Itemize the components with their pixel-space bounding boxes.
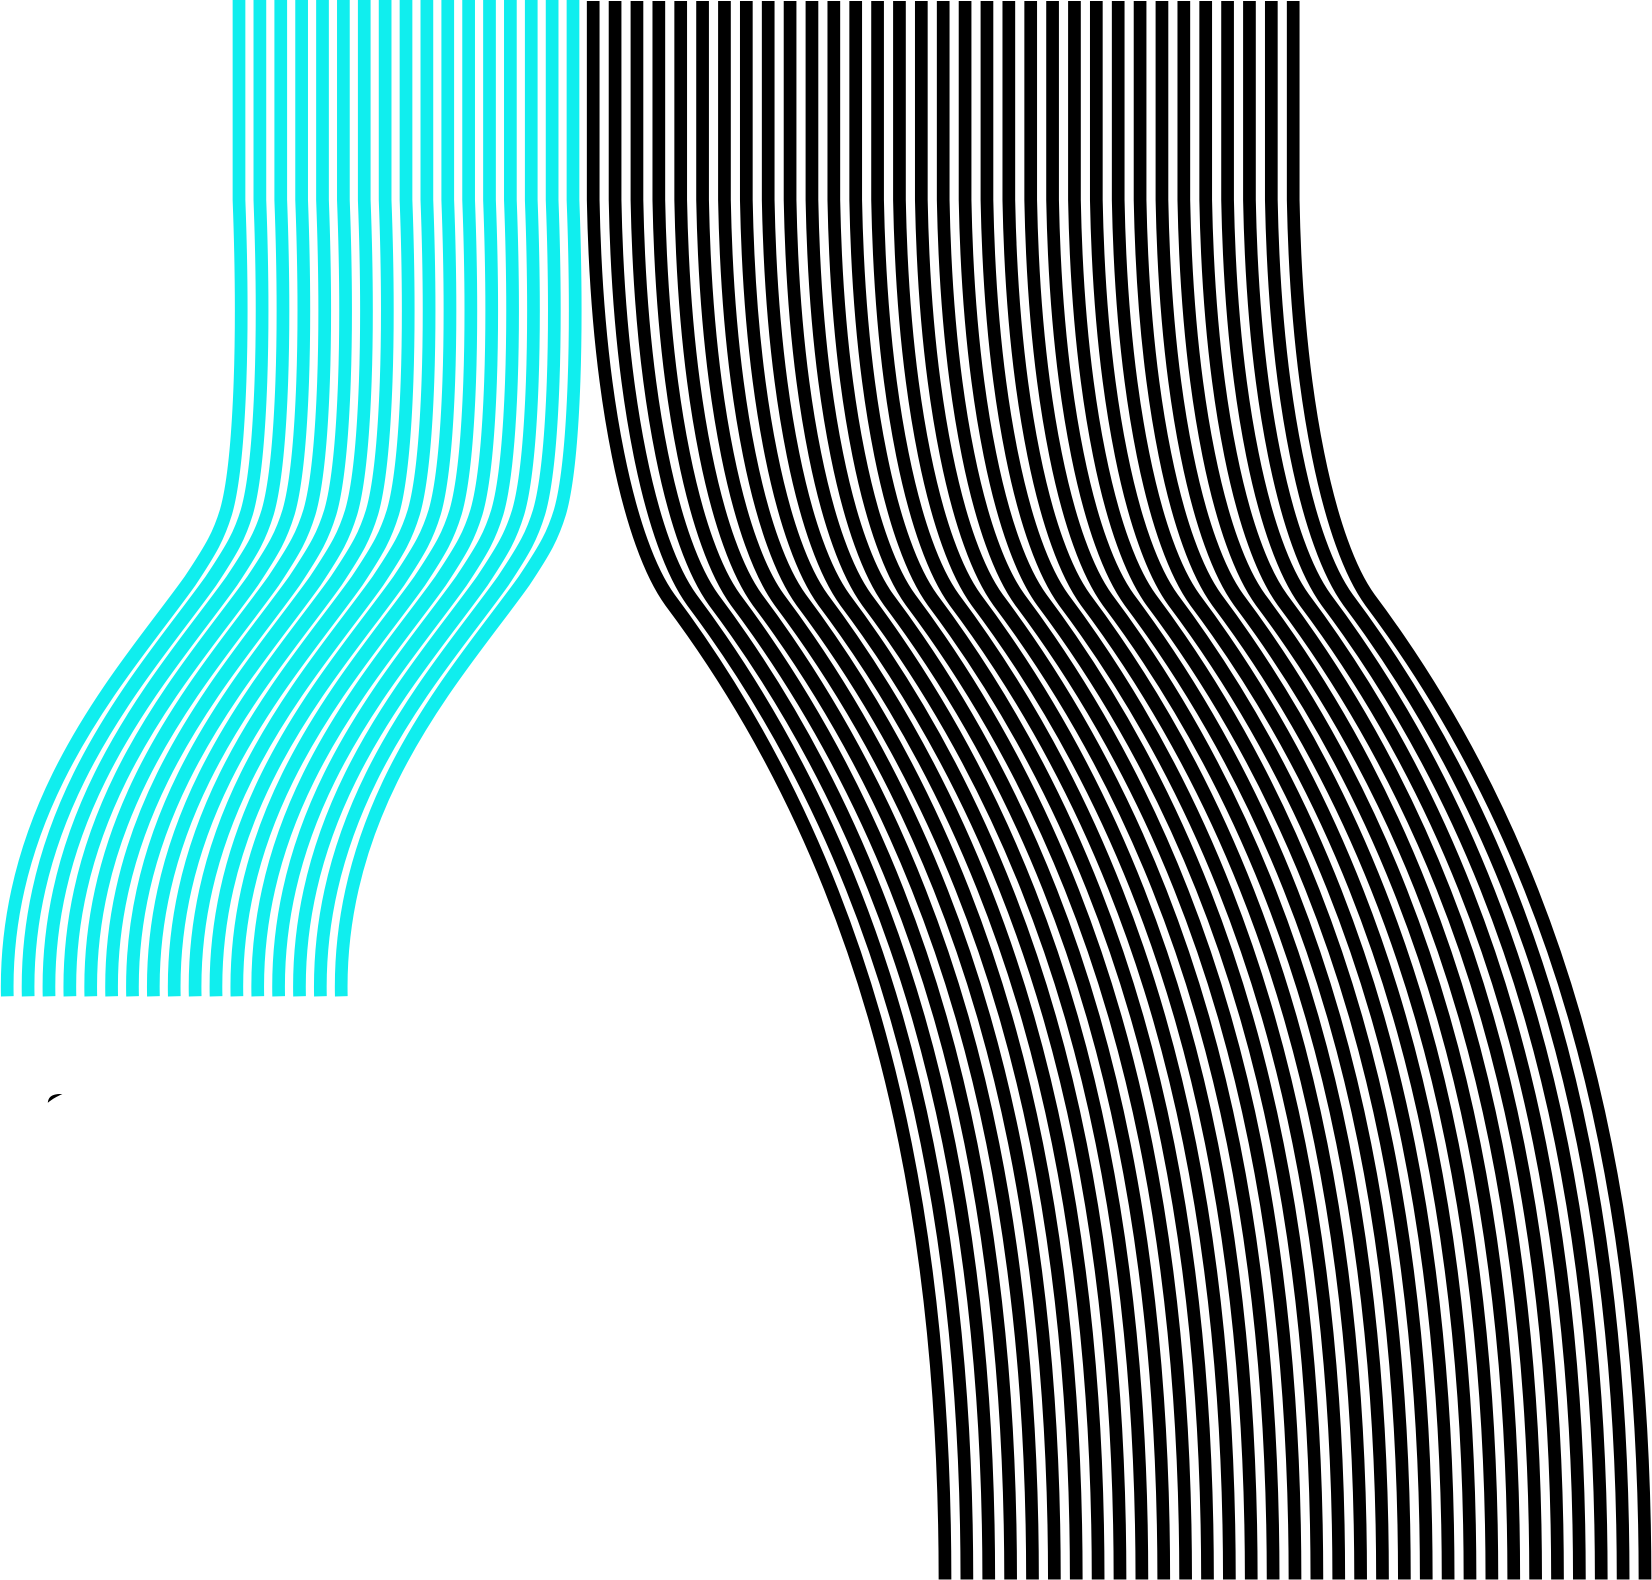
black stripe bundle <box>593 1 1645 1580</box>
cyan stripe bundle <box>7 0 575 996</box>
small black crescent mark <box>48 1094 62 1103</box>
